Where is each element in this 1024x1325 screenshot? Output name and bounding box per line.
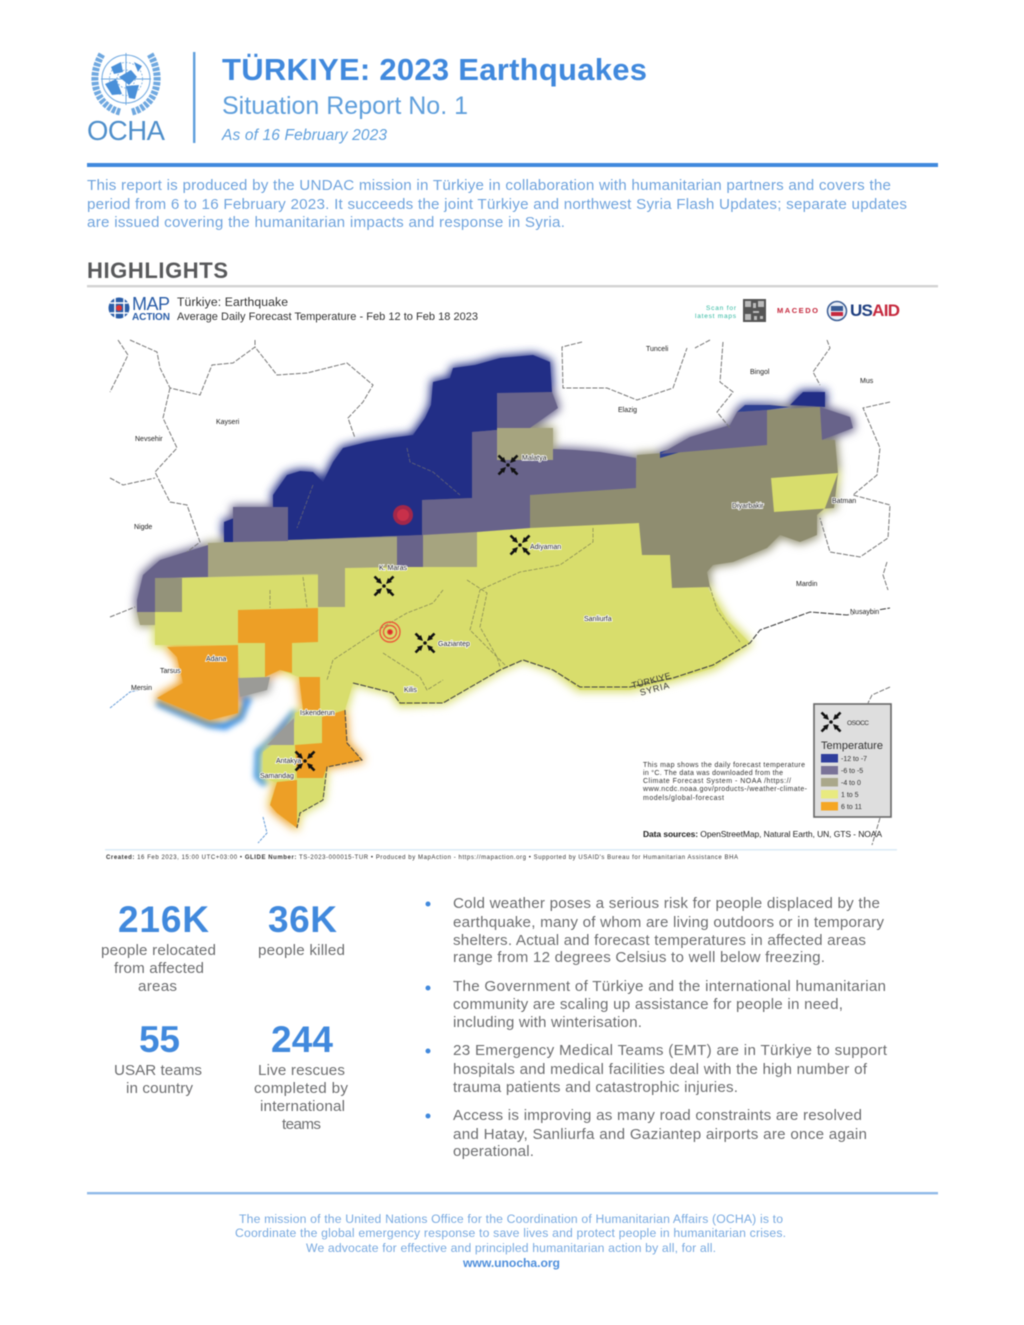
turkey-syria border	[353, 608, 890, 703]
stat: 244 live rescues: international	[260, 1098, 345, 1115]
map regions: coast glow	[157, 695, 296, 784]
intro text: are issued covering the humanitarian impacts and response in Syria.	[87, 214, 565, 231]
bullet: access: Access is improving as many road constraints are resolved	[453, 1107, 862, 1124]
map: city labels: Nigde	[134, 524, 152, 531]
stat: 244 live rescues: Live rescues	[258, 1062, 345, 1079]
map: epicentre north	[393, 505, 413, 525]
stat: 216K people relocated: areas	[138, 978, 177, 995]
bullet: medical teams: trauma patients and catastrophic injuries.	[453, 1079, 738, 1096]
footer mission statement: Coordinate the global emergency response to save lives and protect people in humanitarian crises.	[235, 1226, 786, 1240]
bullet: access: and Hatay, Sanliurfa and Gaziantep airports are once again	[453, 1126, 867, 1143]
partner logos: Scan for	[706, 305, 737, 312]
map: city labels: Adana	[206, 656, 226, 663]
map: city labels: Mus	[860, 378, 874, 385]
map: city labels: Diyarbakir	[732, 503, 764, 510]
header: OCHA logo: OCHA	[87, 115, 166, 146]
orange cells	[157, 608, 362, 828]
header rule	[87, 163, 938, 167]
bullet: cold weather: earthquake, many of whom are living outdoors or in temporary	[453, 914, 884, 931]
header divider	[193, 52, 195, 143]
map: city labels: Bingol	[750, 369, 770, 376]
map header: MapAction logo: ACTION	[132, 312, 170, 323]
map: epicentre south	[380, 622, 400, 642]
stat: 244 live rescues: teams	[282, 1116, 321, 1133]
heading: highlights: HIGHLIGHTS	[87, 258, 228, 283]
date: As of 16 February 2023	[221, 127, 387, 144]
map: country labels	[631, 671, 674, 699]
footer mission statement	[235, 1212, 786, 1270]
intro text: This report is produced by the UNDAC mission in Türkiye in collaboration with humanitarian partners and covers the	[87, 177, 891, 194]
map: city labels: Sanliurfa	[584, 616, 612, 623]
stat: 244 live rescues: 244	[271, 1019, 333, 1060]
title: TÜRKIYE: 2023 Earthquakes	[222, 52, 647, 87]
bullet: government response: community are scaling up assistance for people in need,	[453, 996, 843, 1013]
map note: in °C. The data was downloaded from the	[643, 769, 783, 777]
map note: Climate Forecast System - NOAA /https://	[643, 778, 791, 785]
map: city labels: Nevsehir	[135, 436, 163, 443]
map: city labels: Kayseri	[216, 419, 240, 426]
stat: 36K people killed: 36K	[268, 899, 337, 940]
map: city labels: Tunceli	[646, 346, 669, 353]
map legend: -4 to 0	[841, 780, 861, 787]
bullet: medical teams: hospitals and medical facilities deal with the high number of	[453, 1061, 868, 1078]
stat: 55 USAR teams: in country	[126, 1080, 193, 1097]
stat: 216K people relocated: 216K	[118, 899, 209, 940]
stat: 36K people killed	[258, 899, 345, 959]
stat: 216K people relocated: people relocated	[101, 942, 216, 959]
map note: www.ncdc.noaa.gov/products-/weather-climate-	[642, 786, 808, 793]
map legend: 1 to 5	[841, 792, 859, 799]
intro text: period from 6 to 16 February 2023. It succeeds the joint Türkiye and northwest Syria Flash Updates; separate updates	[87, 196, 907, 213]
map: city labels: Tarsus	[160, 668, 181, 675]
bullet: cold weather: Cold weather poses a serious risk for people displaced by the	[453, 895, 880, 912]
bullet: medical teams: 23 Emergency Medical Teams (EMT) are in Türkiye to support	[453, 1042, 888, 1059]
purple cells	[137, 392, 853, 612]
subtitle: Situation Report No. 1	[222, 92, 468, 120]
stat: 244 live rescues: completed by	[254, 1080, 348, 1097]
footer mission statement: We advocate for effective and principled humanitarian action by all, for all.	[306, 1241, 716, 1255]
tan area east	[530, 407, 838, 588]
map: country labels: SYRIA	[639, 680, 670, 698]
map: city labels: Adiyaman	[530, 544, 561, 551]
map legend: -12 to -7	[841, 756, 867, 763]
yellow square east	[771, 473, 838, 512]
bullet: government response: The Government of Türkiye and the international humanitarian	[453, 978, 886, 995]
map: city labels: Kilis	[404, 687, 417, 694]
map: city labels: Samandag	[260, 773, 294, 780]
map title: Türkiye: Earthquake	[177, 295, 288, 309]
map title	[177, 295, 478, 323]
map title: Average Daily Forecast Temperature - Feb 12 to Feb 18 2023	[177, 311, 478, 323]
map header: MapAction logo	[108, 294, 170, 323]
map: country labels: TÜRKIYE	[631, 671, 672, 691]
stat: 216K people relocated	[101, 899, 216, 995]
map: city labels: Iskenderun	[300, 710, 335, 717]
map: city labels: Mardin	[796, 581, 818, 588]
bullet: medical teams	[426, 1042, 888, 1096]
data sources: Data sources: OpenStreetMap, Natural Earth, UN, GTS - NOAA	[643, 829, 882, 839]
stat: 216K people relocated: from affected	[114, 960, 204, 977]
bullet: access	[426, 1107, 867, 1160]
map: city labels: Mersin	[131, 685, 152, 692]
bullet: cold weather: range from 12 degrees Celsius to well below freezing.	[453, 949, 825, 966]
panel: temperature map	[105, 294, 900, 861]
bullet: government response	[426, 978, 886, 1031]
bullet: cold weather	[426, 895, 884, 966]
partner logos: MACEDO	[777, 306, 818, 315]
stat: 55 USAR teams	[114, 1019, 202, 1097]
map: city labels: Malatya	[522, 455, 547, 462]
map: temperature regions	[137, 355, 853, 828]
tan cells west	[137, 428, 553, 625]
bullet: government response: including with winterisation.	[453, 1014, 642, 1031]
map: city labels: Gaziantep	[438, 641, 470, 648]
map: city labels	[131, 346, 879, 780]
grey land patches	[238, 677, 270, 697]
map: city labels: Elazig	[618, 407, 637, 414]
map: city labels: Nusaybin	[850, 609, 879, 616]
stat: 55 USAR teams: 55	[139, 1019, 180, 1060]
map legend: OSOCC	[847, 720, 869, 727]
footer mission statement: The mission of the United Nations Office for the Coordination of Humanitarian Affairs (OCHA) is to	[239, 1212, 783, 1226]
dark blue area	[273, 355, 552, 540]
bullet: cold weather: shelters. Actual and forecast temperatures in affected areas	[453, 932, 866, 949]
map header: MapAction logo: MAP	[132, 294, 170, 314]
map: borders	[110, 340, 890, 845]
map note: This map shows the daily forecast temperature	[643, 762, 805, 769]
footer rule	[87, 1192, 938, 1194]
partner logos: USAID	[850, 301, 900, 320]
stat: 244 live rescues	[254, 1019, 348, 1133]
map note	[642, 762, 808, 802]
partner logos	[695, 299, 900, 322]
map legend: 6 to 11	[841, 804, 862, 811]
map credit line: Created: 16 Feb 2023, 15:00 UTC+03:00 • GLIDE Number: TS-2023-000015-TUR • Produced by MapAction - https://mapaction.org • Supported by USAID's Bureau for Humanitarian Assistance BHA	[106, 855, 738, 861]
stat: 36K people killed: people killed	[258, 942, 345, 959]
map note: models/global-forecast	[643, 795, 724, 802]
map: city labels: Antakya	[276, 758, 301, 765]
partner logos: latest maps	[695, 313, 737, 320]
bullet: access: operational.	[453, 1143, 534, 1160]
map: city labels: K. Maras	[379, 565, 408, 572]
map legend	[814, 704, 891, 817]
map: city labels: Batman	[832, 498, 856, 505]
header: OCHA logo	[87, 53, 166, 146]
footer mission statement: www.unocha.org	[462, 1256, 560, 1270]
stat: 55 USAR teams: USAR teams	[114, 1062, 202, 1079]
map legend: -6 to -5	[841, 768, 863, 775]
yellow area	[155, 523, 750, 828]
intro text	[87, 177, 907, 231]
icon: UN emblem	[95, 53, 157, 112]
map legend: Temperature	[821, 740, 883, 752]
map: OSOCC icons	[296, 456, 530, 770]
